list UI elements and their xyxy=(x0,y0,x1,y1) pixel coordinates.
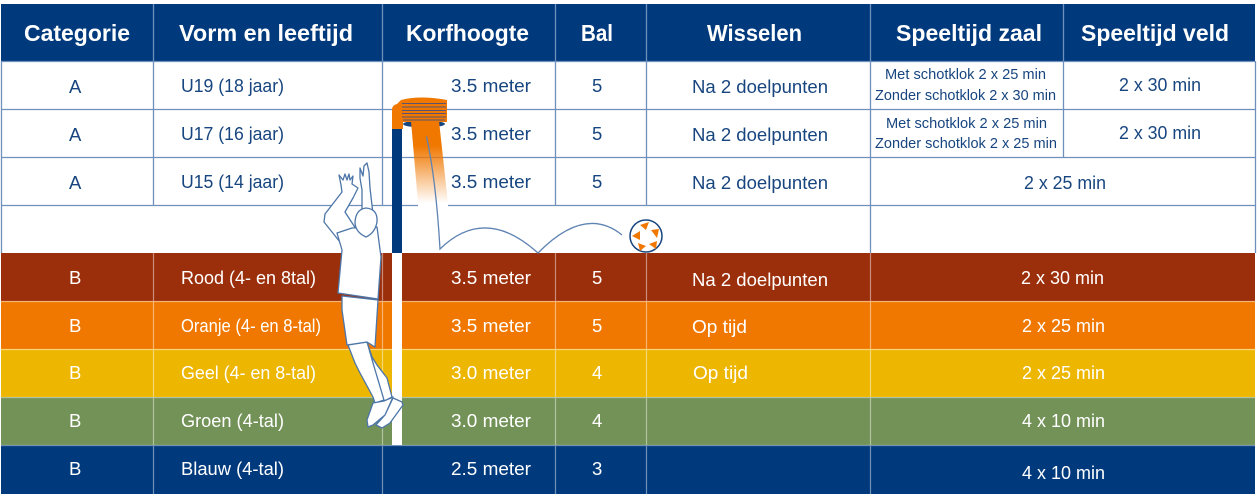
row: Blauw xyxy=(1,445,1255,494)
row: Rood: Rood (4- en 8tal) xyxy=(181,267,316,288)
row: U17: Met schotklok 2 x 25 min xyxy=(886,116,1047,132)
row: U17 xyxy=(69,116,1201,152)
player: left arm xyxy=(324,174,358,242)
row: U15: A xyxy=(69,172,82,193)
row: U17: 2 x 30 min xyxy=(1119,122,1201,143)
row: Geel: 3.0 meter xyxy=(451,362,531,383)
row: U15 xyxy=(69,171,1106,193)
icon: korfball xyxy=(630,220,662,252)
icon: korf basket xyxy=(392,98,448,203)
player: head xyxy=(355,208,377,237)
header: Vorm en leeftijd: Vorm en leeftijd xyxy=(179,20,353,46)
player: shoes xyxy=(367,397,403,428)
row: Rood: Na 2 doelpunten xyxy=(692,269,828,290)
row: U19: 2 x 30 min xyxy=(1119,74,1201,95)
row: U19: A xyxy=(69,76,82,97)
row: U15: U15 (14 jaar) xyxy=(181,171,284,192)
icon: korf post xyxy=(392,129,402,445)
row: U19: Zonder schotklok 2 x 30 min xyxy=(875,88,1056,104)
row: Rood: 5 xyxy=(592,267,602,288)
row: Geel: 2 x 25 min xyxy=(1022,362,1105,383)
row: Oranje xyxy=(1,301,1255,349)
row: U19: Na 2 doelpunten xyxy=(692,76,828,97)
row: Blauw: 4 x 10 min xyxy=(1022,462,1105,483)
row: U15: 5 xyxy=(592,171,602,192)
player: right arm xyxy=(360,163,373,214)
row: Geel: Geel (4- en 8-tal) xyxy=(181,362,316,383)
row: Geel: Op tijd xyxy=(693,362,748,383)
row: Groen: 4 xyxy=(592,410,602,431)
row: Blauw: B xyxy=(69,458,81,479)
player: shorts xyxy=(342,296,378,347)
row: Groen: B xyxy=(69,410,81,431)
row: U17: A xyxy=(69,124,82,145)
row: Oranje: Oranje (4- en 8-tal) xyxy=(181,315,321,336)
row: Oranje: 2 x 25 min xyxy=(1022,315,1105,336)
header: Wisselen: Wisselen xyxy=(707,20,802,46)
row: U19 xyxy=(69,67,1201,104)
row: Rood: B xyxy=(69,267,81,288)
row: Oranje: Op tijd xyxy=(692,316,747,337)
row: Rood: 3.5 meter xyxy=(451,267,531,288)
header: Categorie: Categorie xyxy=(24,20,130,46)
header: Speeltijd veld: Speeltijd veld xyxy=(1081,20,1229,46)
row: Rood xyxy=(1,253,1255,301)
row: Geel xyxy=(1,349,1255,397)
player: back leg xyxy=(367,342,392,402)
row: Blauw: Blauw (4-tal) xyxy=(181,458,284,479)
icon: jumping player xyxy=(324,163,403,428)
row: U17: Na 2 doelpunten xyxy=(692,124,828,145)
header: Bal: Bal xyxy=(581,20,613,46)
player: torso xyxy=(337,227,381,299)
player: front leg xyxy=(348,342,384,403)
row: U19: 5 xyxy=(592,75,602,96)
row: U15: Na 2 doelpunten xyxy=(692,172,828,193)
arrow: ball trajectory xyxy=(426,136,622,253)
header: Speeltijd zaal: Speeltijd zaal xyxy=(896,20,1042,46)
row: U19: Met schotklok 2 x 25 min xyxy=(885,67,1046,83)
row: Oranje: 3.5 meter xyxy=(451,315,531,336)
row: U19: 3.5 meter xyxy=(451,75,531,96)
header row xyxy=(1,4,1255,61)
row: Blauw: 2.5 meter xyxy=(451,458,531,479)
row: Blauw: 3 xyxy=(592,458,602,479)
row: Groen: Groen (4-tal) xyxy=(181,410,284,431)
row: U15: 2 x 25 min xyxy=(1024,172,1106,193)
row: U17: 5 xyxy=(592,123,602,144)
row: Groen: 3.0 meter xyxy=(451,410,531,431)
row: Oranje: 5 xyxy=(592,315,602,336)
header: Korfhoogte: Korfhoogte xyxy=(406,20,529,46)
row: Geel: 4 xyxy=(592,362,602,383)
row: U17: U17 (16 jaar) xyxy=(181,123,284,144)
row: Rood: 2 x 30 min xyxy=(1021,267,1104,288)
row: U19: U19 (18 jaar) xyxy=(181,75,284,96)
row: U17: 3.5 meter xyxy=(451,123,531,144)
row: Oranje: B xyxy=(69,315,81,336)
row: Groen xyxy=(1,397,1255,445)
row: Groen: 4 x 10 min xyxy=(1022,410,1105,431)
row: U15: 3.5 meter xyxy=(451,171,531,192)
category A rows xyxy=(1,61,1256,253)
row: U17: Zonder schotklok 2 x 25 min xyxy=(875,136,1057,152)
row: Geel: B xyxy=(69,362,81,383)
